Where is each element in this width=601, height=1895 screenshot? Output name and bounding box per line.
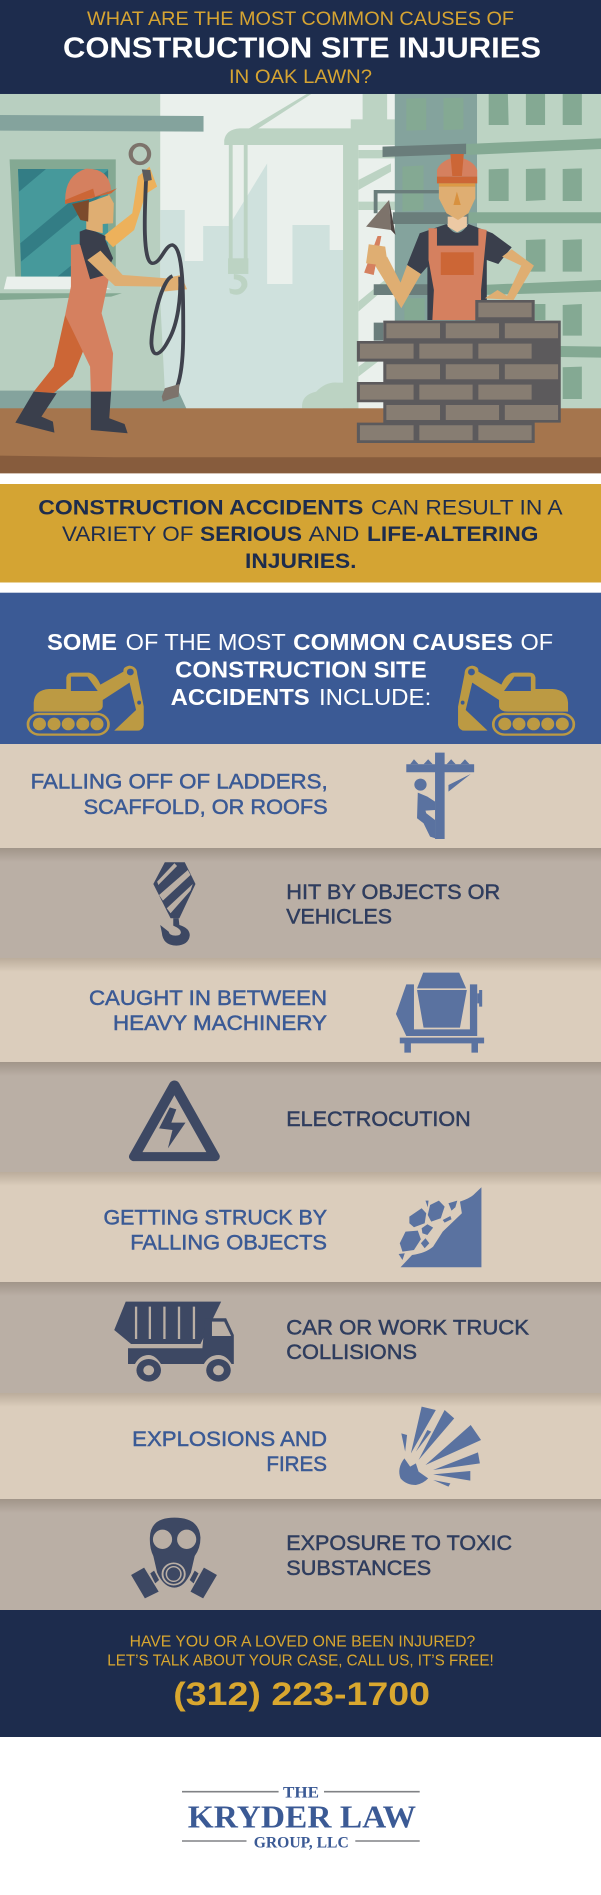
label (286, 1316, 529, 1364)
label: FALLING OFF OF LADDERS, (31, 770, 328, 793)
brick wall (357, 300, 561, 443)
intro text: OF THE MOST (126, 629, 286, 655)
label: CAR OR WORK TRUCK (286, 1316, 529, 1339)
label: GETTING STRUCK BY (104, 1206, 327, 1229)
icon: excavator right (458, 666, 574, 735)
row: hit by objects (0, 848, 601, 958)
statement text (38, 495, 563, 573)
left building (0, 94, 204, 409)
crane (224, 94, 399, 410)
skyline (160, 163, 345, 410)
icon: dump truck (114, 1302, 234, 1382)
row: falling (0, 744, 601, 848)
icon: concrete mixer (396, 973, 484, 1053)
statement text: INJURIES. (245, 549, 356, 573)
bricklayer worker (364, 154, 534, 320)
statement text: VARIETY OF (62, 522, 194, 546)
row: falling objects (0, 1172, 601, 1282)
logo: The Kryder Law Group: THE (283, 1784, 319, 1801)
call to action band: LET’S TALK ABOUT YOUR CASE, CALL US, IT’S FREE! (107, 1653, 494, 1670)
cable and plug (131, 145, 183, 387)
blue intro band (0, 593, 601, 744)
label: SCAFFOLD, OR ROOFS (84, 796, 328, 819)
right building (374, 94, 601, 411)
icon: utility pole climber (406, 753, 474, 839)
row: toxic substances (0, 1499, 601, 1610)
phone number: (312) 223-1700 (173, 1676, 430, 1712)
title line 3: IN OAK LAWN? (229, 66, 372, 88)
row: explosions (0, 1393, 601, 1499)
row: electrocution (0, 1062, 601, 1172)
gold statement band (0, 484, 601, 582)
illustration: construction site with two workers (0, 94, 601, 473)
label: SUBSTANCES (286, 1557, 431, 1580)
icon: explosion (399, 1407, 481, 1487)
label (286, 881, 500, 929)
intro text: ACCIDENTS (171, 684, 310, 710)
icon: gas mask (131, 1518, 217, 1598)
label: ELECTROCUTION (286, 1108, 471, 1131)
label: VEHICLES (286, 906, 392, 929)
label (132, 1428, 327, 1476)
header band (0, 0, 601, 94)
intro text: INCLUDE: (319, 684, 431, 710)
logo: The Kryder Law Group: GROUP, LLC (254, 1834, 349, 1851)
logo: The Kryder Law Group (182, 1784, 420, 1851)
label: FIRES (266, 1453, 327, 1476)
statement text: AND (308, 522, 360, 546)
label: EXPLOSIONS AND (132, 1428, 327, 1451)
label: EXPOSURE TO TOXIC (286, 1532, 512, 1555)
statement text: CAN RESULT IN A (371, 495, 563, 519)
statement text: LIFE-ALTERING (367, 522, 538, 546)
row: caught in machinery (0, 958, 601, 1062)
title line 1: WHAT ARE THE MOST COMMON CAUSES OF (87, 8, 514, 30)
label: HIT BY OBJECTS OR (286, 881, 500, 904)
label: COLLISIONS (286, 1341, 417, 1364)
intro text: CONSTRUCTION SITE (175, 657, 427, 683)
statement text: SERIOUS (200, 522, 302, 546)
call to action text: HAVE YOU OR A LOVED ONE BEEN INJURED? (130, 1634, 475, 1651)
ground (0, 408, 601, 473)
icon: rock slide (399, 1187, 481, 1267)
label (286, 1532, 512, 1580)
label (31, 770, 328, 819)
worker holding cable (15, 145, 187, 433)
icon: crane hook (153, 862, 195, 946)
row: truck collisions (0, 1282, 601, 1393)
icon: high voltage triangle (134, 1085, 215, 1157)
icon: excavator left (28, 666, 144, 735)
intro text: SOME (47, 629, 117, 655)
intro text: COMMON CAUSES (293, 629, 513, 655)
label (104, 1206, 327, 1254)
intro text: OF (520, 629, 553, 655)
call to action band (0, 1610, 601, 1737)
label: CAUGHT IN BETWEEN (89, 987, 327, 1010)
logo: The Kryder Law Group: KRYDER LAW (188, 1798, 416, 1834)
label: HEAVY MACHINERY (113, 1012, 327, 1035)
title line 2: CONSTRUCTION SITE INJURIES (63, 32, 541, 64)
label: FALLING OBJECTS (130, 1231, 327, 1254)
intro text (47, 629, 553, 710)
label (89, 987, 327, 1035)
statement text: CONSTRUCTION ACCIDENTS (38, 495, 363, 519)
